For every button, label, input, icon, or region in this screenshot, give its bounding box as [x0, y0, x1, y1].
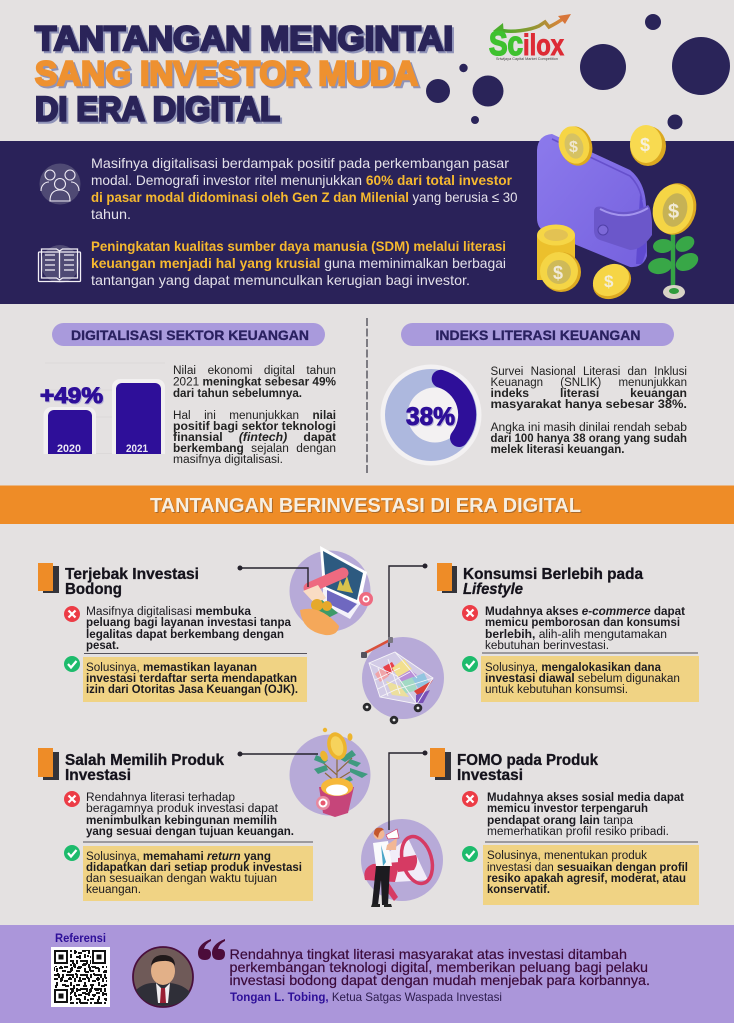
text: human resources: keuangan menjadi hal yang krusial guna meminimalkan berbagai	[91, 255, 506, 271]
heading	[65, 752, 224, 784]
coin stack: $	[553, 263, 563, 283]
bar chart: digital economy	[40, 363, 165, 455]
coin stack	[537, 224, 581, 292]
heading: digitalisasi: DIGITALISASI SEKTOR KEUANGAN	[71, 327, 309, 343]
quote text: perkembangan teknologi digital, memberikan peluang bagi pelaku	[230, 959, 648, 975]
solution box	[83, 846, 313, 901]
text: digital demographics: di pasar modal didominasi oleh Gen Z dan Milenial yang berusia ≤ 30	[91, 189, 518, 205]
solution text: Solusinya, memastikan layanan	[86, 662, 257, 674]
coin: $	[604, 272, 614, 291]
text: literacy survey: Keuanagn (SNLIK) menunjukkan	[490, 377, 687, 389]
heading: Lifestyle	[463, 581, 523, 598]
problem text: Rendahnya literasi terhadap	[86, 792, 235, 804]
problem text: pesat.	[86, 640, 119, 652]
text: human resources: tantangan yang dapat memunculkan kerugian bagi investor.	[91, 272, 470, 288]
solution text	[487, 850, 688, 896]
heading: digitalisasi	[52, 323, 325, 346]
text: literacy survey: dari 100 hanya 38 orang yang sudah	[490, 433, 687, 445]
heading marker	[430, 748, 451, 780]
qr code	[51, 947, 110, 1007]
title: DI ERA DIGITAL	[35, 90, 280, 128]
panel: intro band	[0, 141, 734, 304]
heading marker	[437, 563, 457, 593]
problem text	[487, 792, 684, 838]
donut chart: 38%	[380, 364, 482, 466]
icon: problem	[462, 791, 478, 807]
illustration: money plant	[238, 728, 370, 817]
solution text: investasi diawal sebelum digunakan	[485, 673, 680, 685]
illustration: wallet with coins	[537, 122, 702, 306]
coin: $	[569, 139, 578, 156]
solution text: didapatkan dari setiap produk investasi	[86, 862, 302, 874]
problem text: memerhatikan profil resiko pribadi.	[487, 826, 669, 838]
solution text: Solusinya, mengalokasikan dana	[485, 662, 662, 674]
text: digital economy: Hal ini menunjukkan nilai	[173, 410, 336, 422]
illustration: person with megaphone	[361, 750, 443, 907]
text: digital demographics	[91, 155, 518, 222]
icon: solution	[64, 656, 80, 672]
heading: Investasi	[457, 767, 523, 784]
solution text: keuangan.	[86, 884, 141, 896]
icon: open book	[38, 245, 80, 283]
illustration: laptop and investment	[290, 546, 373, 635]
text: digital economy: dari tahun sebelumnya.	[173, 388, 302, 400]
text: literacy survey: Survei Nasional Literasi dan Inklusi	[490, 366, 687, 378]
heading	[457, 752, 598, 784]
heading marker	[38, 748, 59, 780]
coin	[630, 125, 666, 166]
icon: problem	[64, 791, 80, 807]
logo: Sc	[489, 25, 523, 63]
solution text: investasi dan sesuaikan dengan profil	[487, 862, 688, 874]
text: human resources: Peningkatan kualitas sumber daya manusia (SDM) melalui literasi	[91, 238, 506, 254]
logo: ilox	[523, 29, 564, 62]
solution text: izin dari Otoritas Jasa Keuangan (OJK).	[86, 684, 298, 696]
title: TANTANGAN MENGINTAI	[35, 20, 453, 58]
heading	[65, 566, 199, 598]
solution text: investasi terdaftar serta mendapatkan	[86, 673, 297, 685]
problem text: berlebih, alih-alih mengutamakan	[485, 629, 667, 641]
icon: problem	[64, 606, 80, 622]
icon: solution	[462, 656, 478, 672]
plant with coin	[647, 178, 702, 299]
logo	[489, 14, 571, 63]
panel: fomo	[430, 748, 699, 905]
heading: indeks literasi: INDEKS LITERASI KEUANGAN	[436, 327, 640, 343]
solution text: konservatif.	[487, 884, 550, 896]
panel: konsumsi berlebih	[437, 563, 699, 702]
problem text: pendapat orang lain tanpa	[487, 815, 634, 827]
problem text: yang sesuai dengan tujuan keuangan.	[86, 826, 294, 838]
solution text	[485, 662, 680, 696]
text: digital demographics: Masifnya digitalisasi berdampak positif pada perkembangan pasar	[91, 155, 509, 171]
solution text: resiko apakah agresif, moderat, atau	[487, 873, 686, 885]
problem text	[485, 606, 685, 652]
illustration: shopping cart	[361, 564, 444, 724]
icon: investors group	[40, 164, 80, 204]
heading: referensi: Referensi	[55, 931, 106, 945]
panel: terjebak investasi bodong	[38, 563, 307, 702]
icon: quote mark	[198, 939, 225, 960]
donut chart: 38%: 38%	[406, 403, 455, 431]
heading: FOMO pada Produk	[457, 752, 598, 769]
solution text: Solusinya, memahami return yang	[86, 851, 271, 863]
problem text: kebutuhan berinvestasi.	[485, 640, 609, 652]
solution text	[86, 851, 302, 896]
text: digital economy: finansial (fintech) dapat	[173, 432, 336, 444]
decorative circles	[426, 14, 730, 130]
heading: Konsumsi Berlebih pada	[463, 566, 643, 583]
text: digital economy	[173, 365, 336, 466]
text: literacy survey: indeks literasi keuangan	[490, 388, 687, 400]
icon: solution	[64, 845, 80, 861]
problem text	[86, 792, 294, 838]
section banner	[0, 486, 734, 524]
text: literacy survey: melek literasi keuangan.	[490, 444, 624, 456]
connector: terjebak	[238, 566, 308, 587]
heading	[463, 566, 643, 598]
attribution: Tongan L. Tobing, Ketua Satgas Waspada Investasi	[230, 990, 502, 1004]
heading: Bodong	[65, 581, 122, 598]
problem text: legalitas dapat berkembang dengan	[86, 629, 284, 641]
title: SANG INVESTOR MUDA	[35, 55, 418, 93]
solution text: untuk kebutuhan konsumsi.	[485, 684, 628, 696]
title	[35, 20, 453, 128]
icon: solution	[462, 846, 478, 862]
quote text	[230, 946, 650, 988]
bar 2020: 2020	[57, 443, 81, 455]
text: human resources	[91, 238, 506, 288]
portrait	[133, 947, 193, 1007]
text: digital economy: Nilai ekonomi digital tahun	[173, 365, 336, 377]
text: digital economy: berkembang sejalan dengan	[173, 443, 336, 455]
bar 2021: 2021	[126, 443, 148, 455]
problem text: memicu pemborosan dan konsumsi	[485, 617, 680, 629]
coin	[554, 122, 597, 170]
solution text	[86, 662, 298, 696]
panel: footer	[0, 925, 734, 1023]
panel: salah memilih produk	[38, 748, 313, 901]
text: digital demographics: modal. Demografi investor ritel menunjukkan 60% dari total investor	[91, 172, 513, 188]
text: digital economy: masifnya digitalisasi.	[173, 454, 283, 466]
text: digital economy: positif bagi sektor teknologi	[173, 421, 336, 433]
heading: Investasi	[65, 767, 131, 784]
problem text: memicu investor terpengaruh	[487, 803, 648, 815]
text: literacy survey: masyarakat hanya sebesar 38%.	[490, 399, 687, 411]
solution text: Solusinya, menentukan produk	[487, 850, 647, 862]
text: literacy survey	[490, 366, 687, 456]
problem text: Mudahnya akses sosial media dapat	[487, 792, 684, 804]
text: literacy survey: Angka ini masih dinilai rendah sebab	[490, 422, 687, 434]
heading: Terjebak Investasi	[65, 566, 199, 583]
solution box	[83, 657, 307, 702]
solution box	[483, 845, 699, 905]
solution box	[481, 656, 699, 702]
problem text: Masifnya digitalisasi membuka	[86, 606, 252, 618]
logo: Sriwijaya Capital Market Competition	[496, 57, 558, 61]
solution text: dan sesuaikan dengan waktu tujuan	[86, 873, 277, 885]
section banner: TANTANGAN BERINVESTASI DI ERA DIGITAL	[150, 495, 581, 517]
problem text: beragamnya produk investasi dapat	[86, 803, 279, 815]
heading: indeks literasi	[401, 323, 674, 346]
text: digital demographics: tahun.	[91, 206, 131, 222]
heading: Salah Memilih Produk	[65, 752, 224, 769]
problem text: Mudahnya akses e-commerce dapat	[485, 606, 685, 618]
plant with coin: $	[668, 201, 679, 223]
quote text: Rendahnya tingkat literasi masyarakat atas investasi ditambah	[230, 946, 627, 962]
coin	[587, 258, 637, 306]
coin: $	[640, 135, 650, 155]
icon: problem	[462, 605, 478, 621]
problem text: menimbulkan kebingunan memilih	[86, 815, 277, 827]
problem text	[86, 606, 292, 652]
problem text: peluang bagi layanan investasi tanpa	[86, 617, 292, 629]
text: digital economy: 2021 meningkat sebesar 49%	[173, 376, 336, 388]
quote text: investasi bodong dapat dengan mudah menjebak para korbannya.	[230, 972, 650, 988]
growth label: +49%	[40, 383, 103, 408]
heading marker	[38, 563, 59, 593]
